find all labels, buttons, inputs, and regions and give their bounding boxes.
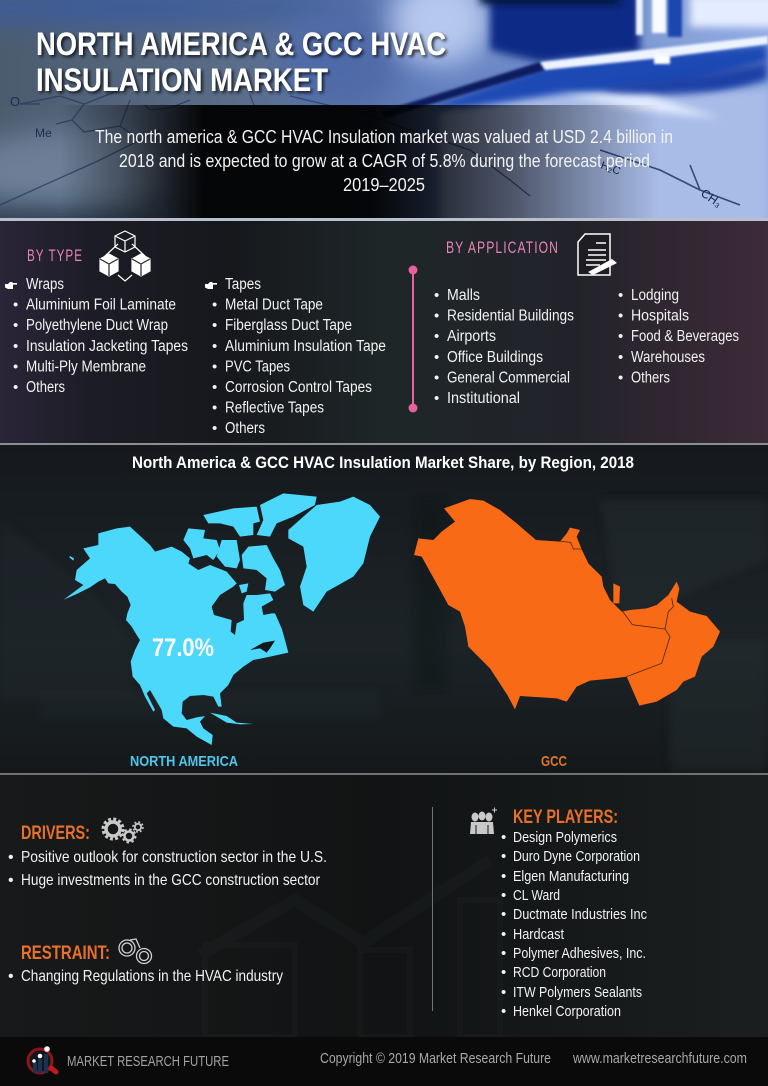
- list: key players: [501, 829, 647, 1020]
- icon: people: [470, 808, 497, 834]
- list: wraps: •: [13, 358, 18, 376]
- label: GCC: GCC: [541, 753, 567, 770]
- brand name: MARKET RESEARCH FUTURE: [67, 1053, 229, 1070]
- list: wraps: •: [13, 338, 18, 355]
- title: INSULATION MARKET: [36, 62, 328, 98]
- list: tapes: •: [212, 400, 217, 416]
- list: wraps: Wraps: [26, 276, 64, 293]
- list: tapes: Fiberglass Duct Tape: [225, 317, 352, 334]
- by application heading: BY APPLICATION: [446, 238, 559, 257]
- list: applications 1: Malls: [447, 287, 480, 304]
- list: key players: Hardcast: [513, 926, 565, 943]
- list: applications 1: •: [434, 328, 439, 345]
- list: key players: Duro Dyne Corporation: [513, 848, 640, 865]
- header photo background: CH₃: [698, 186, 725, 210]
- intro text: [95, 127, 673, 195]
- list: tapes: Aluminium Insulation Tape: [225, 338, 386, 355]
- footer: [0, 1037, 768, 1086]
- list: key players: •: [501, 926, 506, 943]
- list: key players: Design Polymerics: [513, 829, 617, 846]
- map: GCC: [414, 499, 720, 709]
- list: applications 1: •: [434, 349, 439, 366]
- list: tapes: •: [212, 420, 217, 437]
- heading: drivers: DRIVERS:: [21, 823, 90, 844]
- icon: gears: [103, 819, 143, 842]
- header photo background: Me: [35, 126, 52, 140]
- list: restraint: •: [8, 968, 14, 985]
- label: North America: NORTH AMERICA: [130, 753, 238, 770]
- list: tapes: •: [212, 296, 217, 314]
- list: applications 1: •: [434, 390, 439, 407]
- copyright: Copyright © 2019 Market Research Future: [320, 1050, 551, 1067]
- list: key players: Elgen Manufacturing: [513, 868, 629, 885]
- list: key players: CL Ward: [513, 887, 560, 904]
- list: tapes: [205, 276, 386, 437]
- list: key players: Henkel Corporation: [513, 1003, 621, 1020]
- list: applications 1: •: [434, 370, 439, 386]
- list: applications 2: Warehouses: [631, 349, 705, 366]
- map: North America: [62, 493, 380, 745]
- list: applications 1: Office Buildings: [447, 349, 543, 366]
- list: wraps: [5, 276, 188, 396]
- list: tapes: Corrosion Control Tapes: [225, 379, 372, 396]
- chart title: North America & GCC HVAC Insulation Market Share, by Region, 2018: [132, 453, 634, 472]
- list: key players: RCD Corporation: [513, 964, 606, 981]
- header photo background: H₂C: [599, 160, 622, 178]
- list: wraps: Insulation Jacketing Tapes: [26, 338, 188, 355]
- list: tapes: •: [212, 317, 217, 334]
- list: applications 2: Others: [631, 370, 670, 386]
- list: wraps: Multi-Ply Membrane: [26, 358, 146, 376]
- title: NORTH AMERICA & GCC HVAC: [36, 26, 446, 62]
- list: key players: •: [501, 906, 506, 923]
- list: key players: •: [501, 945, 506, 962]
- header photo background: O: [10, 94, 20, 109]
- list: applications 1: Airports: [447, 328, 496, 345]
- list: key players: Ductmate Industries Inc: [513, 906, 647, 923]
- icon: document: [578, 234, 617, 275]
- header photo background: [0, 0, 768, 242]
- panel: segmentation: [0, 218, 768, 445]
- list: key players: ITW Polymers Sealants: [513, 984, 642, 1001]
- list: key players: •: [501, 848, 506, 865]
- heading: key players: KEY PLAYERS:: [513, 807, 618, 828]
- list: applications 2: •: [618, 349, 623, 366]
- intro text: 2019–2025: [343, 175, 425, 195]
- pink timeline: [408, 266, 418, 412]
- logo: [28, 1046, 56, 1073]
- icon: cubes: [100, 231, 150, 281]
- list: drivers: Positive outlook for construction sector in the U.S.: [21, 849, 327, 866]
- intro text: The north america & GCC HVAC Insulation market was valued at USD 2.4 billion in: [95, 127, 673, 147]
- list: wraps: Others: [26, 379, 65, 396]
- list: applications 2: Lodging: [631, 287, 679, 304]
- list: applications 1: Residential Buildings: [447, 308, 574, 324]
- list: drivers: •: [8, 872, 14, 889]
- list: key players: •: [501, 1003, 506, 1020]
- divider: [432, 807, 433, 1011]
- heading: restraint: RESTRAINT:: [21, 943, 110, 964]
- list: key players: Polymer Adhesives, Inc.: [513, 945, 646, 962]
- list: drivers: •: [8, 849, 14, 866]
- list: tapes: Others: [225, 420, 265, 437]
- list: key players: •: [501, 868, 506, 885]
- icon: handcuffs: [119, 939, 152, 964]
- title: [36, 26, 446, 98]
- list: wraps: Polyethylene Duct Wrap: [26, 317, 168, 334]
- list: key players: •: [501, 887, 506, 904]
- list: applications 1: •: [434, 308, 439, 324]
- list: applications 1: [434, 287, 574, 407]
- list: applications 2: •: [618, 287, 623, 304]
- list: wraps: Aluminium Foil Laminate: [26, 296, 176, 314]
- list: wraps: •: [13, 296, 18, 314]
- list: key players: •: [501, 829, 506, 846]
- list: wraps: •: [13, 379, 18, 396]
- list: drivers: [8, 849, 327, 889]
- list: applications 2: Food & Beverages: [631, 328, 739, 345]
- panel: regional share: [0, 445, 768, 775]
- list: applications 2: •: [618, 370, 623, 386]
- list: key players: •: [501, 984, 506, 1001]
- list: applications 1: General Commercial: [447, 370, 570, 386]
- list: applications 2: Hospitals: [631, 308, 689, 324]
- value: 77.0%: 77.0%: [152, 634, 214, 662]
- list: applications 1: •: [434, 287, 439, 304]
- list: wraps: •: [13, 317, 18, 334]
- list: applications 1: Institutional: [447, 390, 520, 407]
- panel: drivers, restraint, key players: [0, 775, 768, 1037]
- list: tapes: •: [212, 358, 217, 376]
- list: tapes: Metal Duct Tape: [225, 296, 323, 314]
- list: tapes: Tapes: [225, 276, 261, 293]
- list: tapes: •: [212, 379, 217, 396]
- by type heading: BY TYPE: [27, 246, 83, 265]
- list: applications 2: •: [618, 328, 623, 345]
- list: tapes: Reflective Tapes: [225, 400, 324, 416]
- list: key players: •: [501, 964, 506, 981]
- list: applications 2: •: [618, 308, 623, 324]
- intro text: 2018 and is expected to grow at a CAGR of 5.8% during the forecast period: [119, 151, 650, 171]
- list: tapes: •: [212, 338, 217, 355]
- list: applications 2: [618, 287, 739, 386]
- list: drivers: Huge investments in the GCC construction sector: [21, 872, 321, 889]
- dark band behind intro text: [60, 105, 660, 218]
- list: restraint: Changing Regulations in the HVAC industry: [21, 968, 283, 985]
- list: tapes: PVC Tapes: [225, 358, 290, 376]
